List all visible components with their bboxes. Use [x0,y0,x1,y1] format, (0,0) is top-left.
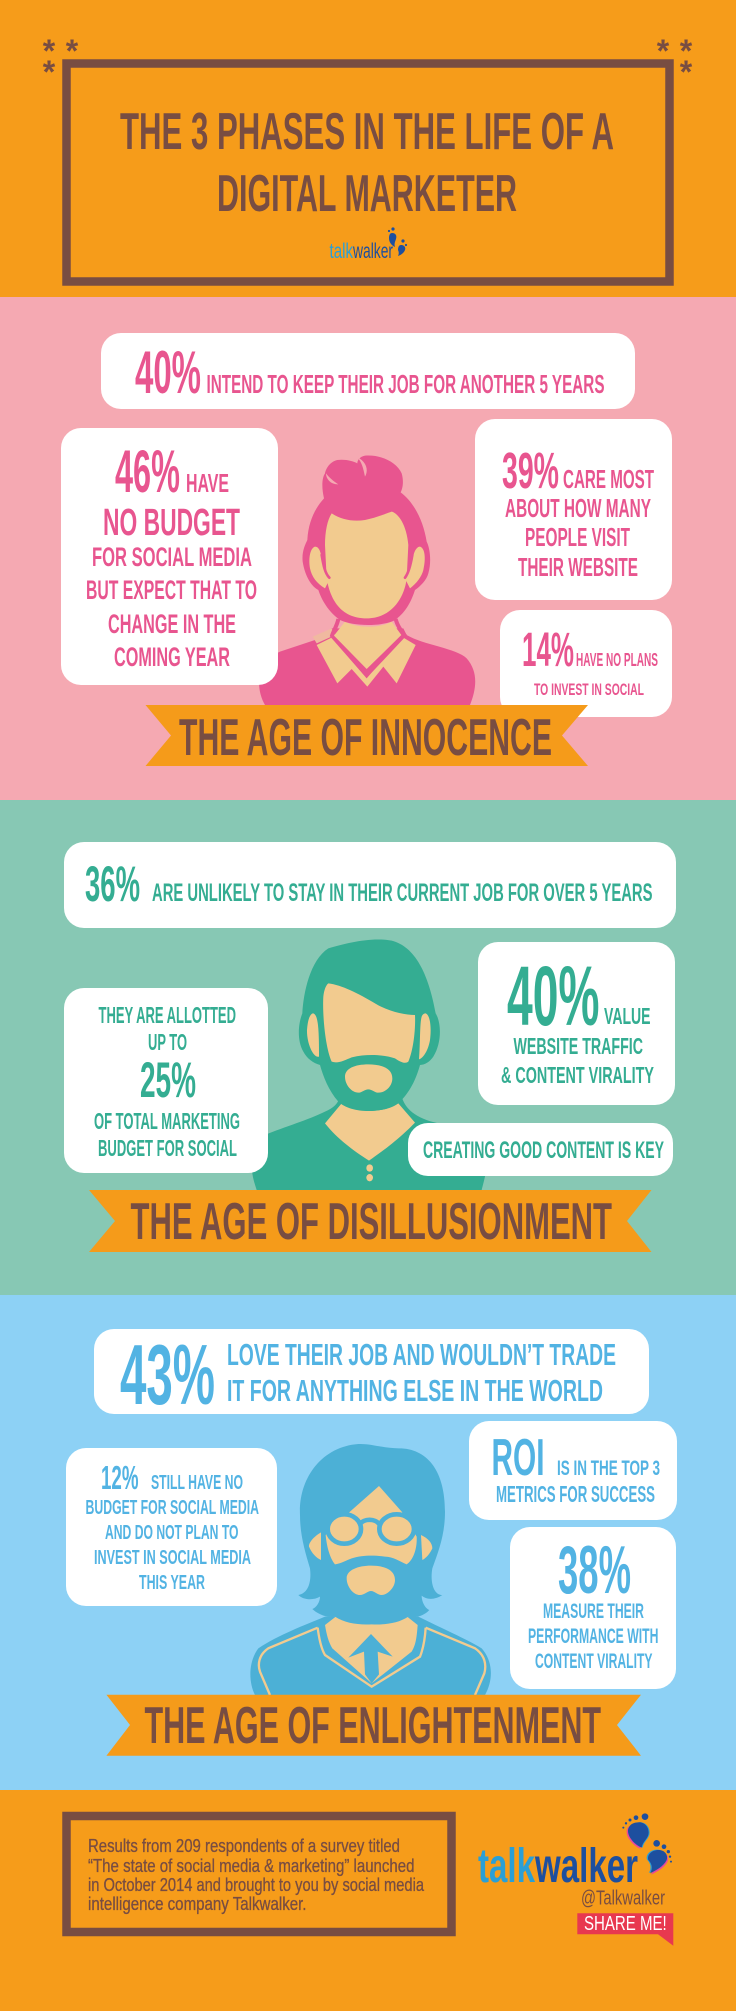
logo: talkwalker small: walker [352,240,393,263]
callout: ROI metric [469,1421,677,1520]
survey note frame: Results from 209 respondents of a survey titled [88,1836,400,1856]
panel: the age of innocence [0,297,736,800]
survey note frame: “The state of social media & marketing” launched [88,1856,414,1876]
decorative asterisks right: * [680,33,693,69]
logo: talkwalker large: walker [534,1840,638,1893]
survey note frame: intelligence company Talkwalker. [88,1894,306,1914]
callout: 12% no budget: 12% [101,1459,138,1496]
callout: 40% keep job: 40% [135,339,201,406]
callout: ROI metric: ROI [492,1429,544,1487]
callout: 25% of budget: 25% [140,1052,196,1108]
callout: 14% no plans [500,610,672,717]
panel: header [0,0,736,297]
share me flag [577,1913,673,1946]
callout: 40% value traffic: VALUE [604,1003,650,1029]
callout: 46% no budget: BUT EXPECT THAT TO [86,575,257,605]
survey note frame: in October 2014 and brought to you by social media [88,1875,425,1895]
share me flag: SHARE ME! [584,1913,667,1935]
title [120,103,614,223]
logo: talkwalker small [330,227,407,263]
callout: 46% no budget: COMING YEAR [114,642,230,672]
callout: 12% no budget: STILL HAVE NO [151,1472,243,1494]
callout: 39% website visitors: CARE MOST [563,464,654,494]
decorative asterisks right: * [680,54,693,90]
callout: 39% website visitors [475,419,672,600]
callout: 14% no plans: HAVE NO PLANS [576,650,658,670]
callout: creating good content [408,1123,673,1176]
callout: 38% content virality: CONTENT VIRALITY [535,1650,652,1673]
logo: talkwalker large: talk [478,1840,535,1893]
callout: 14% no plans: 14% [522,624,574,677]
title: DIGITAL MARKETER [217,165,517,223]
decorative asterisks left: * [66,33,79,69]
logo: talkwalker small: talk [330,240,353,263]
callout: 12% no budget [66,1448,277,1606]
panel: footer [0,1790,736,2011]
callout: 46% no budget: CHANGE IN THE [108,609,236,639]
callout: 38% content virality [510,1527,676,1689]
logo: talkwalker large [478,1813,672,1893]
callout: 12% no budget: AND DO NOT PLAN TO [105,1522,238,1544]
callout: 46% no budget [61,428,278,685]
callout: 38% content virality: 38% [558,1532,631,1608]
callout: 46% no budget: 46% [115,438,180,505]
callout: 46% no budget: HAVE [186,468,229,498]
banner: the age of innocence [146,705,588,767]
callout: 40% value traffic: WEBSITE TRAFFIC [514,1033,643,1059]
callout: 36% unlikely to stay [64,842,676,928]
illustration: bearded person [251,939,488,1190]
callout: ROI metric: IS IN THE TOP 3 [557,1457,660,1480]
panel: the age of enlightenment [0,1295,736,1790]
callout: 46% no budget: FOR SOCIAL MEDIA [92,542,252,572]
callout: 43% love job: 43% [120,1328,215,1423]
callout: 39% website visitors: 39% [502,442,559,499]
callout: 25% of budget: THEY ARE ALLOTTED [98,1002,236,1028]
decorative asterisks left: * [43,54,56,90]
callout: 39% website visitors: THEIR WEBSITE [518,552,638,582]
callout: 12% no budget: BUDGET FOR SOCIAL MEDIA [86,1497,259,1519]
callout: 25% of budget: BUDGET FOR SOCIAL [98,1135,237,1161]
decorative asterisks left: * [43,33,56,69]
callout: 40% value traffic [478,942,675,1105]
callout: 39% website visitors: PEOPLE VISIT [525,522,630,552]
callout: 25% of budget [64,988,268,1173]
callout: 12% no budget: INVEST IN SOCIAL MEDIA [94,1547,251,1569]
decorative asterisks right: * [657,33,670,69]
decorative asterisks right [657,33,693,90]
decorative asterisks left [43,33,79,90]
callout: 14% no plans: TO INVEST IN SOCIAL [534,680,644,699]
twitter handle: @Talkwalker [581,1888,665,1910]
callout: 38% content virality: MEASURE THEIR [543,1600,644,1623]
callout: 43% love job [94,1328,649,1423]
callout: 25% of budget: OF TOTAL MARKETING [94,1108,240,1134]
callout: 36% unlikely to stay: 36% [85,856,140,912]
title frame [66,64,670,282]
illustration: person with hair bun [259,456,475,705]
callout: 25% of budget: UP TO [148,1029,187,1055]
survey note frame [66,1816,452,1932]
callout: 40% value traffic: 40% [507,949,600,1043]
callout: 12% no budget: THIS YEAR [139,1572,205,1594]
panel: the age of disillusionment [0,800,736,1295]
callout: 40% keep job [101,333,635,409]
callout: 46% no budget: NO BUDGET [103,502,240,544]
illustration: long-haired person with glasses [250,1444,491,1695]
